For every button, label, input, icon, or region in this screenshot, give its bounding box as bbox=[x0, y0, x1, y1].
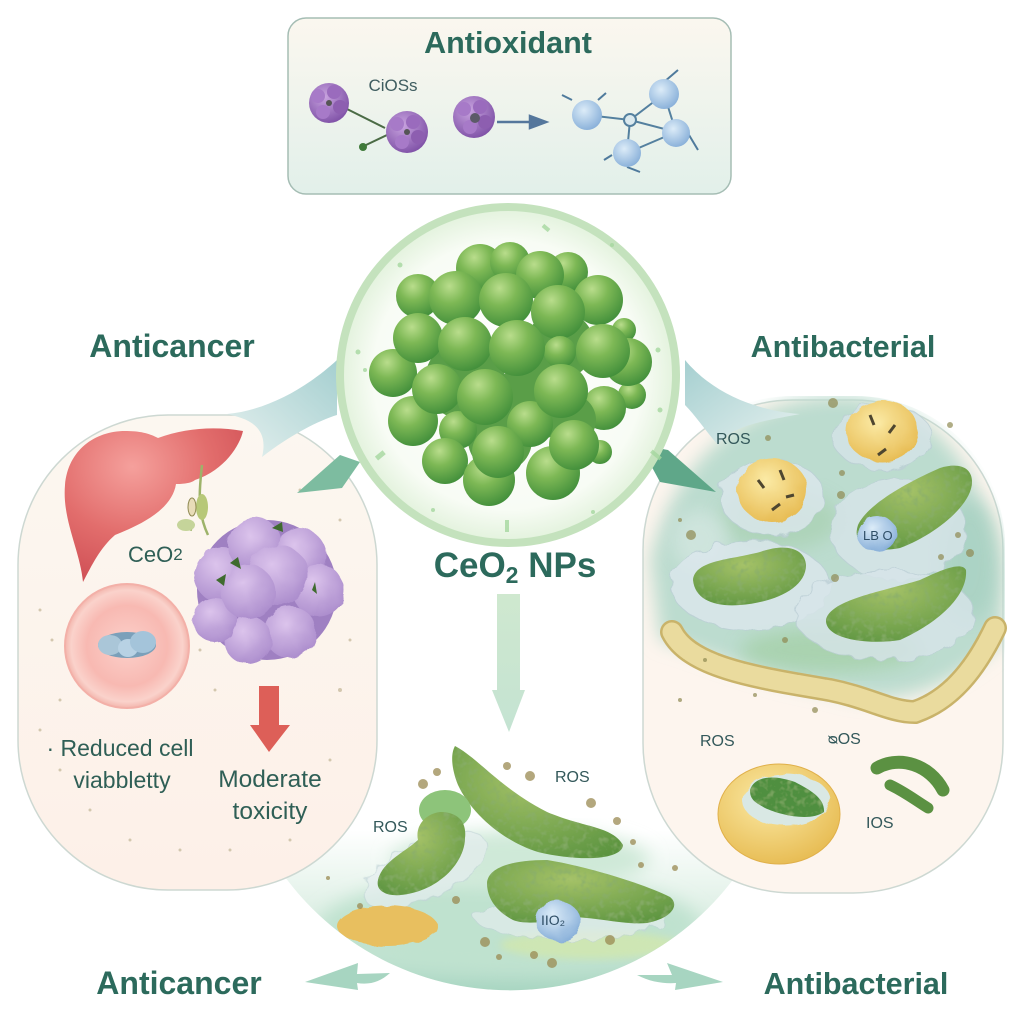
arrow: left upper ribbon bbox=[227, 360, 337, 457]
labels: ROS bottom: ROS bbox=[555, 769, 590, 786]
icon: ROS molecules bbox=[309, 83, 495, 153]
labels: ROS: ROS bbox=[700, 733, 735, 750]
panel: antioxidant bbox=[288, 18, 731, 194]
text: moderate toxicity: toxicity bbox=[233, 798, 308, 825]
heading: CeO2 NPs: NPs bbox=[518, 546, 596, 585]
label: ROS right top: ROS bbox=[716, 431, 751, 448]
arrow: bottom left bbox=[305, 963, 390, 990]
label: CeO2: 2 bbox=[173, 545, 183, 564]
icon: purple tumor cell bbox=[193, 518, 344, 664]
icon: yellow capsule with bacterium bbox=[718, 764, 840, 864]
heading: bottom antibacterial: Antibacterial bbox=[764, 967, 948, 1001]
inner specks bbox=[356, 224, 662, 532]
panel: left anticancer bbox=[18, 415, 377, 890]
text: reduced cell viability: · Reduced cell bbox=[46, 735, 194, 761]
text: moderate toxicity: Moderate bbox=[218, 766, 322, 793]
text: reduced cell viability: viabbletty bbox=[73, 767, 171, 793]
mottled biofilm bbox=[650, 396, 1003, 698]
particles bbox=[678, 398, 974, 713]
icon: liver bbox=[65, 428, 243, 582]
arrow: right upper ribbon bbox=[685, 360, 800, 445]
heading: CeO2 NPs: 2 bbox=[506, 562, 518, 588]
heading: right antibacterial: Antibacterial bbox=[751, 330, 935, 364]
icon: yellow chain bbox=[672, 628, 995, 712]
icon: nanoparticle sprig bbox=[177, 465, 208, 535]
arrow: antioxidant reaction bbox=[497, 116, 546, 128]
icon: bacteria cluster bbox=[337, 746, 674, 946]
icon: bacteria on membranes bbox=[670, 466, 975, 660]
bottom dome backdrop bbox=[280, 820, 740, 990]
icon: neutralized molecule bbox=[562, 70, 698, 172]
arrow: to right panel bbox=[640, 445, 716, 492]
particles bbox=[326, 762, 678, 968]
arrow: bottom right bbox=[637, 963, 723, 990]
heading: antioxidant: Antioxidant bbox=[424, 26, 592, 60]
green biofilm bbox=[320, 830, 700, 973]
labels: ROS bottom: IIO₂ bbox=[541, 912, 565, 928]
nanoparticle spheres bbox=[369, 242, 652, 506]
heading: left anticancer: Anticancer bbox=[89, 328, 255, 364]
central nanoparticle circle bbox=[340, 207, 676, 543]
icon: bacteria on membranes: LB O bbox=[863, 528, 893, 543]
speckles bbox=[38, 488, 352, 852]
arrow: down to bottom dome bbox=[492, 594, 525, 732]
label: ROS: CiOSs bbox=[368, 76, 418, 95]
labels: ROS: IOS bbox=[866, 815, 894, 832]
arrow: red down bbox=[250, 686, 290, 752]
heading: CeO2 NPs: CeO bbox=[434, 546, 506, 585]
labels: ROS: ᴓOS bbox=[828, 731, 861, 748]
label: CeO2: CeO bbox=[128, 542, 173, 567]
icon: small bacteria bbox=[877, 762, 943, 808]
arrow: to left panel bbox=[297, 455, 360, 493]
panel: bottom dome contents bbox=[320, 746, 700, 973]
panel: right antibacterial bbox=[643, 396, 1003, 893]
labels: ROS bottom bbox=[373, 769, 590, 928]
labels: ROS bbox=[700, 731, 894, 832]
labels: ROS bottom: ROS bbox=[373, 819, 408, 836]
icon: yellow cells bbox=[720, 400, 932, 535]
heading: bottom anticancer: Anticancer bbox=[96, 965, 262, 1001]
icon: pink cell bbox=[65, 584, 189, 708]
